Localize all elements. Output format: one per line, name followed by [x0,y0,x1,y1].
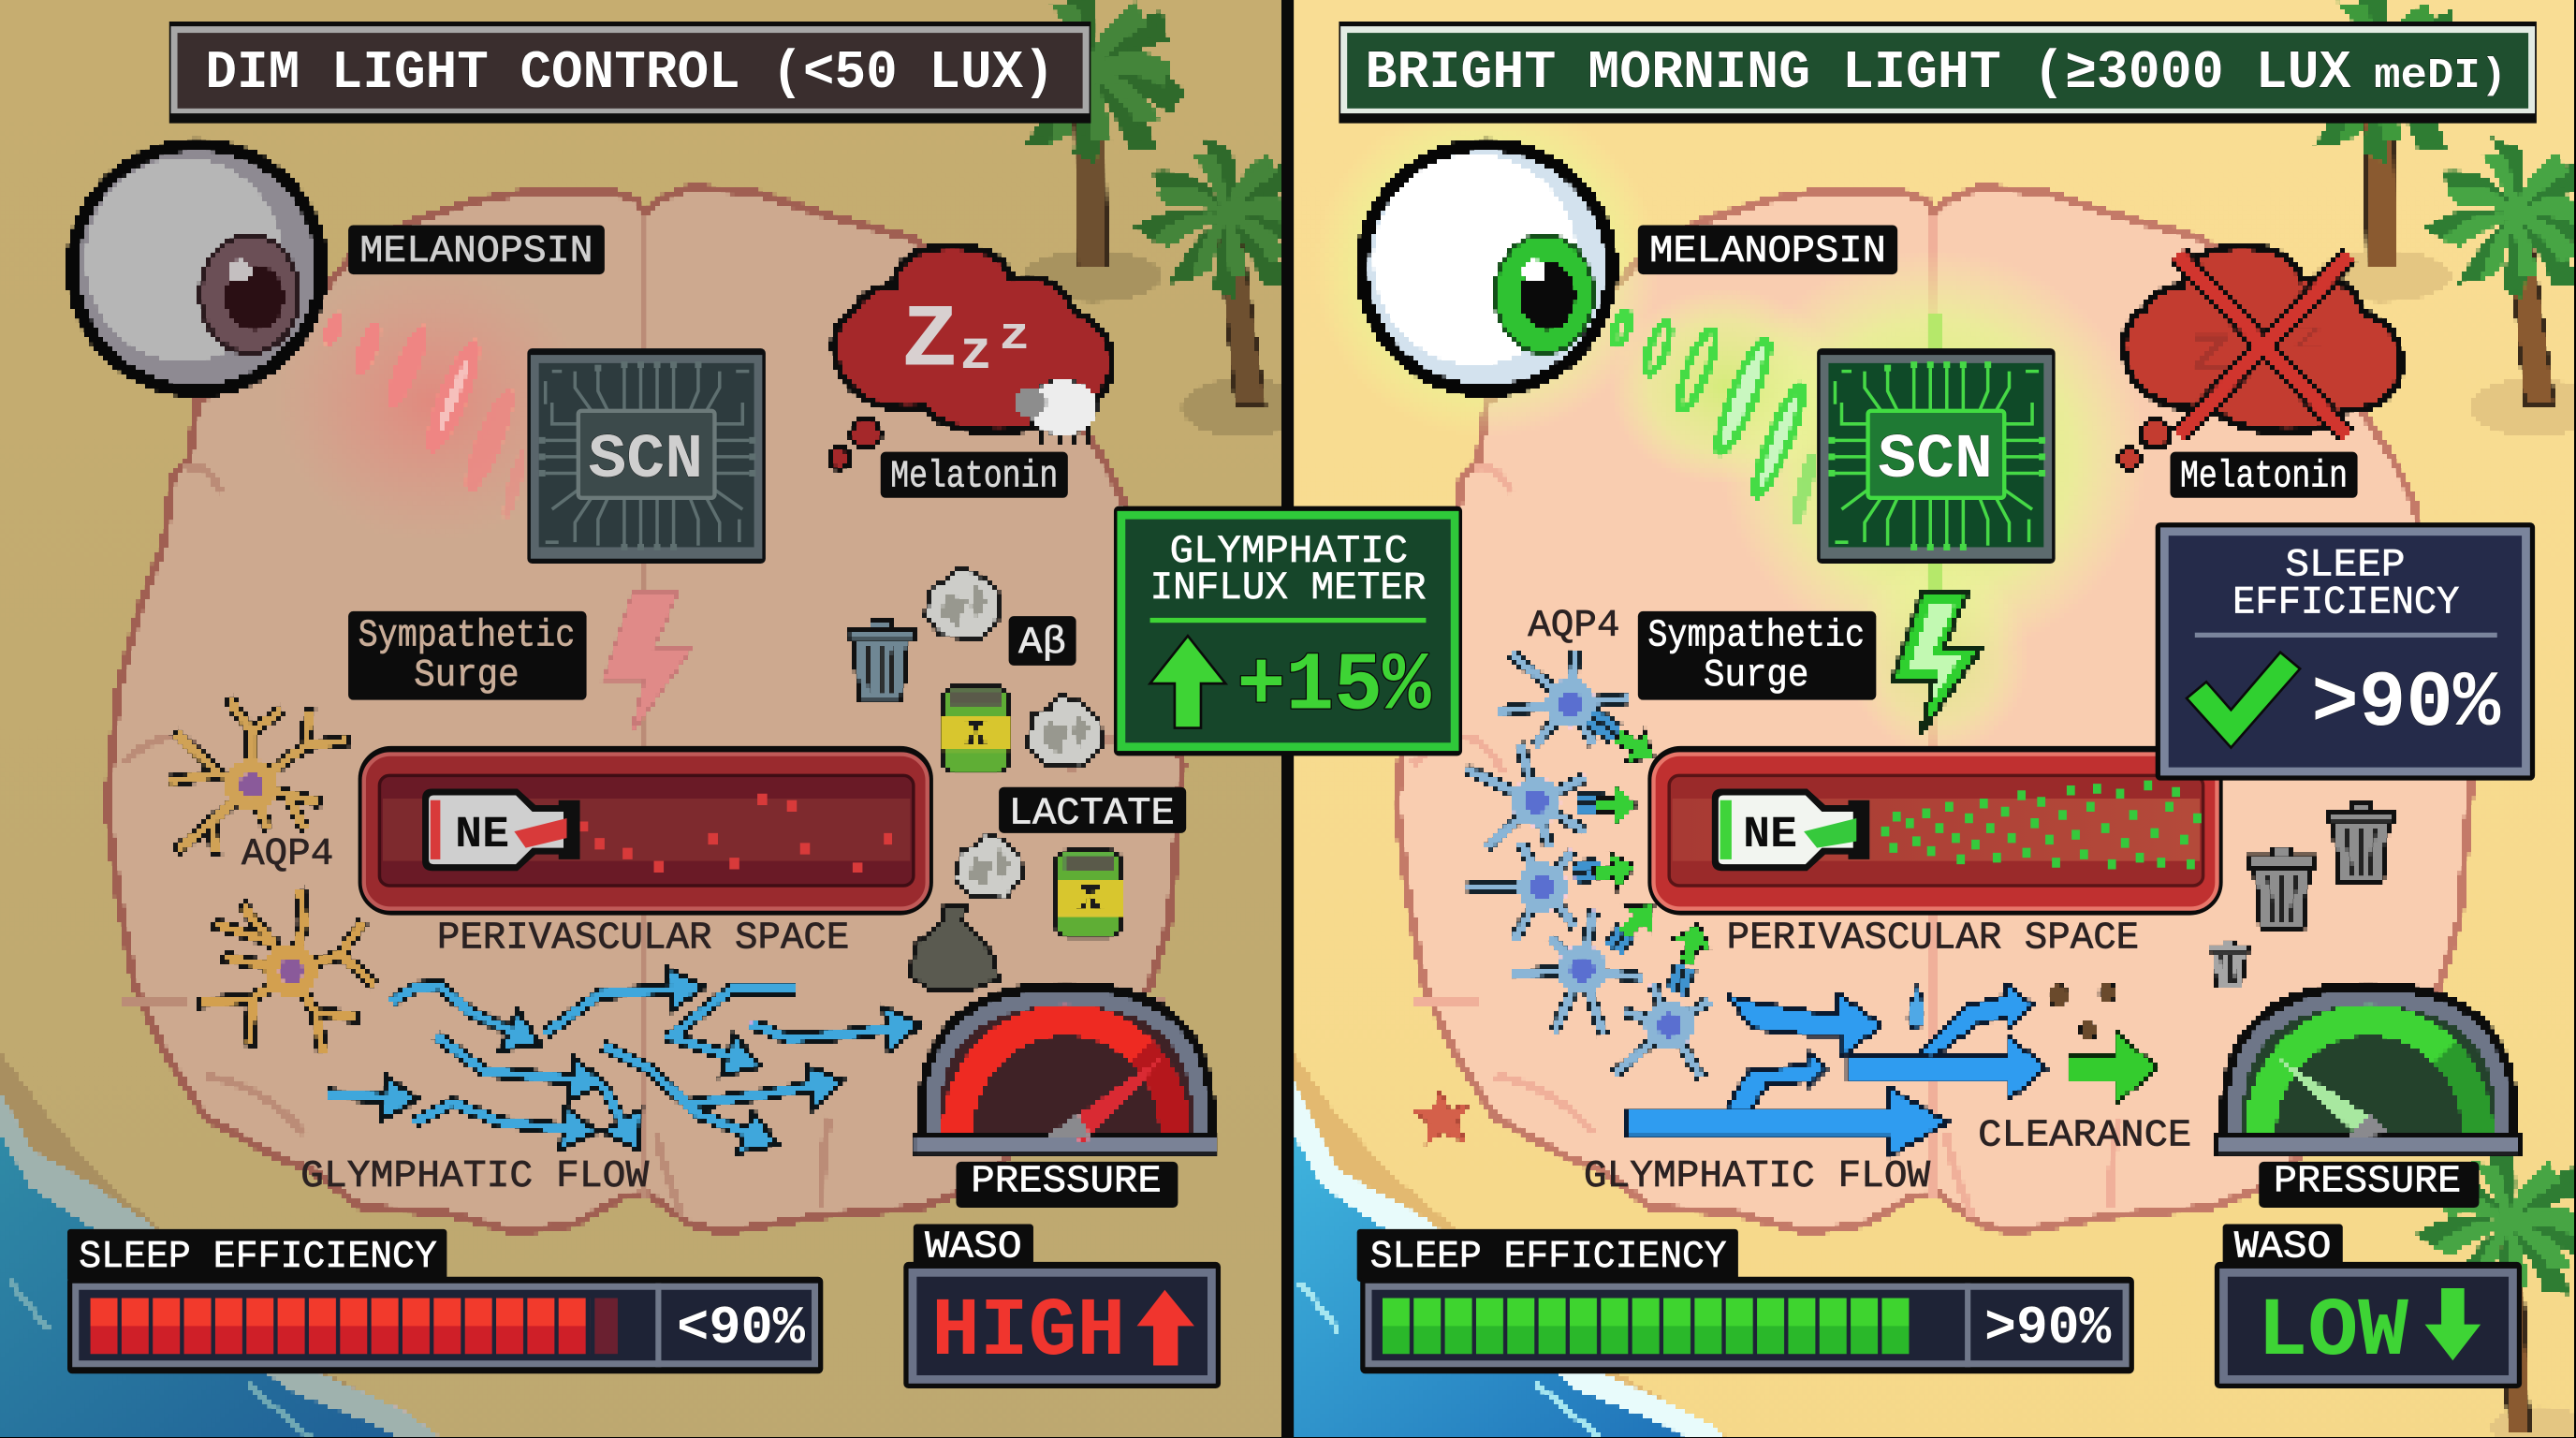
left lightning bolt [603,592,692,735]
left sympathetic surge label: Sympathetic [359,615,575,658]
left eye, dim [72,144,322,391]
left astrocyte lower [204,894,372,1049]
right SCN chip: SCN [1878,425,1993,496]
left AQP4 label: AQP4 [242,833,333,876]
water droplet [1909,986,1925,1029]
right green glow [1314,98,2147,756]
right melatonin cloud, crossed out: z [2291,313,2324,361]
icon: debris rock [925,567,1001,639]
left melatonin label: Melatonin [890,456,1058,499]
panel: glymphatic influx meter: +15% [1237,640,1431,733]
left palm tree, right edge [1129,132,1326,437]
left WASO readout: WASO [925,1226,1022,1269]
left SCN chip [527,348,766,564]
clearance arrow [2069,1032,2159,1104]
right astrocyte 2 [1466,742,1586,848]
left astrocyte upper [174,703,344,849]
left title banner [169,22,1090,124]
left sleep efficiency bar: <90% [677,1299,805,1359]
panel: sleep efficiency result: EFFICIENCY [2232,580,2459,625]
left melatonin cloud [828,246,1111,469]
icon: starfish [1412,1090,1469,1144]
right astrocyte 4 [1512,910,1641,1035]
right melatonin cloud, crossed out [2118,246,2401,469]
right lightning bolt core [1909,603,1960,703]
right lightning bolt [1893,592,1982,735]
right sleep efficiency bar: >90% [1984,1299,2112,1359]
right title banner: meDI) [2374,51,2507,100]
panel: glymphatic influx meter: GLYMPHATIC [1170,529,1408,574]
right eye, bright [1362,144,1612,391]
left sympathetic surge label: Surge [414,654,520,697]
panel: glymphatic influx meter [1114,506,1462,756]
left palm tree, upper [982,0,1198,302]
left melanopsin label: MELANOPSIN [359,230,593,273]
right title banner: BRIGHT MORNING LIGHT (≥3000 LUX [1365,43,2351,104]
icon: debris rock [1027,695,1103,768]
left perivascular space label: PERIVASCULAR SPACE [437,917,849,961]
right astrocyte 1 [1499,649,1630,746]
icon: sheep [1014,379,1097,444]
icon: debris rock [955,833,1023,899]
left glymphatic flow arrows [329,986,890,1134]
left sleep efficiency bar: SLEEP EFFICIENCY [79,1236,437,1279]
lactate label: LACTATE [1009,792,1175,835]
right perivascular space label: PERIVASCULAR SPACE [1727,917,2139,961]
icon: trash can [2249,848,2315,929]
right brain [1397,187,2472,1232]
right astrocyte 5 [1615,984,1710,1078]
right light rays [1610,311,1816,522]
left red light glow [274,263,587,542]
icon: trash can [2328,803,2393,884]
right palm tree, upper [2271,0,2488,302]
left sleep efficiency bar [67,1229,823,1373]
panel: glymphatic influx meter: INFLUX METER [1150,565,1426,610]
right title banner [1339,22,2537,124]
left cloud Zzz [902,292,1030,392]
icon: radioactive barrel [943,687,1009,772]
right sleep efficiency bar [1357,1229,2134,1373]
right blood vessel with norepinephrine [1647,746,2223,916]
right pressure gauge [2217,981,2520,1155]
cleared debris particles [2049,983,2116,1040]
right melatonin label: Melatonin [2180,456,2348,499]
right palm tree, right edge [2419,132,2576,437]
right WASO readout [2215,1225,2522,1388]
left brain [107,187,1183,1232]
left cloud Zzz: Z [902,292,958,392]
right glymphatic flow arrows [1625,983,2047,1157]
left pressure gauge [914,981,1218,1155]
right sympathetic surge label: Sympathetic [1647,615,1865,658]
left title banner: DIM LIGHT CONTROL (<50 LUX) [205,43,1055,104]
right beach and ocean [1293,1051,1734,1438]
right pressure label: PRESSURE [2274,1160,2461,1203]
left cloud Zzz: z [999,310,1030,362]
right sleep efficiency bar: SLEEP EFFICIENCY [1370,1236,1727,1279]
right NE bottle: NE [1743,811,1797,860]
left SCN chip: SCN [588,425,703,496]
right sympathetic surge label [1638,611,1876,700]
right palm tree, lower [2410,1139,2576,1438]
right AQP4 label: AQP4 [1528,605,1620,648]
left pressure label: PRESSURE [971,1160,1162,1203]
panel: sleep efficiency result: >90% [2311,660,2501,749]
left NE bottle: NE [455,811,509,860]
right WASO readout: LOW [2258,1286,2408,1379]
left NE bottle [422,788,580,871]
right glymphatic flow label: GLYMPHATIC FLOW [1584,1155,1931,1198]
panel divider [1281,0,1294,1438]
right NE bottle [1712,788,1869,871]
green influx arrows [1590,719,1718,970]
clearance label: CLEARANCE [1978,1114,2191,1157]
amyloid beta label [1009,616,1076,666]
left blood vessel with norepinephrine [359,746,933,916]
panel: sleep efficiency result: SLEEP [2285,542,2405,587]
left WASO readout: HIGH [931,1286,1125,1379]
right panel background: bright sand [1288,0,2576,1438]
amyloid beta label: Aβ [1018,622,1066,665]
right SCN chip [1817,348,2056,564]
icon: small trash can [2210,940,2249,989]
right green norepinephrine particles [1881,781,2202,869]
left sympathetic surge label [348,611,587,700]
right melatonin cloud, crossed out: Z [2190,325,2232,389]
right melanopsin label: MELANOPSIN [1649,230,1886,273]
left cloud Zzz: z [959,321,992,385]
right astrocyte 3 [1467,843,1575,940]
icon: trash can [848,621,914,701]
right WASO readout: WASO [2234,1226,2331,1269]
icon: waste bag [909,907,999,990]
left panel background: dim sand [0,0,1288,1438]
icon: radioactive barrel [1057,851,1122,936]
panel: sleep efficiency result [2156,522,2535,781]
right sympathetic surge label: Surge [1704,654,1808,697]
left WASO readout [903,1225,1221,1388]
AQP4 channels [1573,716,1686,992]
left glymphatic flow label: GLYMPHATIC FLOW [300,1155,650,1198]
left light rays [319,309,530,521]
left beach and ocean [0,1051,444,1438]
